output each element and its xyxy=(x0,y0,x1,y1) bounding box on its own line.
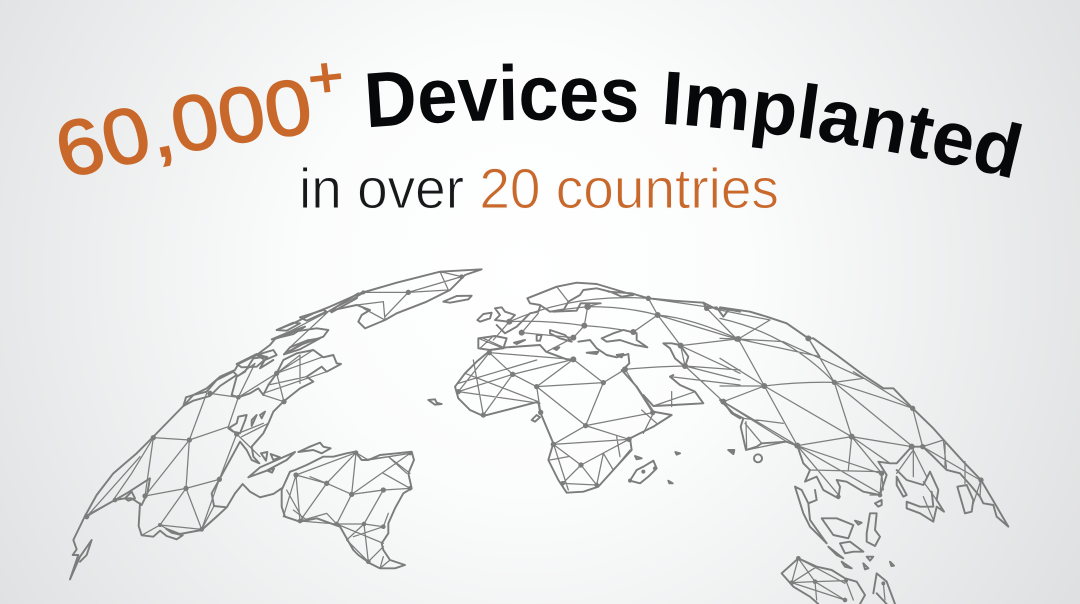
Madagascar and Indian Ocean islands xyxy=(630,450,734,483)
map: Europe, Africa and Middle East xyxy=(455,283,740,493)
network nodes xyxy=(720,335,984,602)
Europe coastline xyxy=(477,283,740,369)
headline number: 60,000+: + xyxy=(310,63,342,92)
Australia coastline xyxy=(782,558,895,604)
network links xyxy=(720,310,981,600)
Arctic islands xyxy=(125,293,358,501)
map: Asia and Oceania xyxy=(720,307,1008,604)
North America and Greenland coastline xyxy=(70,269,482,579)
map: Americas xyxy=(70,269,482,579)
headline word: Implanted: Implanted xyxy=(665,72,1022,178)
network links xyxy=(458,287,740,490)
title xyxy=(58,63,1022,220)
network nodes xyxy=(84,274,464,564)
world map: wireframe globe xyxy=(70,269,1008,604)
headline number: 60,000+: 60,000 xyxy=(58,80,310,175)
Arabia and western Asia coastline xyxy=(643,375,740,418)
South-East Asia coastline and islands xyxy=(728,450,973,569)
Caribbean islands and Iceland xyxy=(248,296,472,477)
network links xyxy=(87,272,462,568)
island: Sri Lanka xyxy=(754,454,762,462)
network nodes xyxy=(456,296,739,487)
Africa coastline xyxy=(455,345,672,493)
headline word: Devices: Devices xyxy=(368,64,636,128)
South America coastline xyxy=(282,452,414,568)
Asia northern and Pacific coastline xyxy=(720,307,1008,527)
subtitle: in over 20 countries: in over 20 countries xyxy=(299,156,779,220)
